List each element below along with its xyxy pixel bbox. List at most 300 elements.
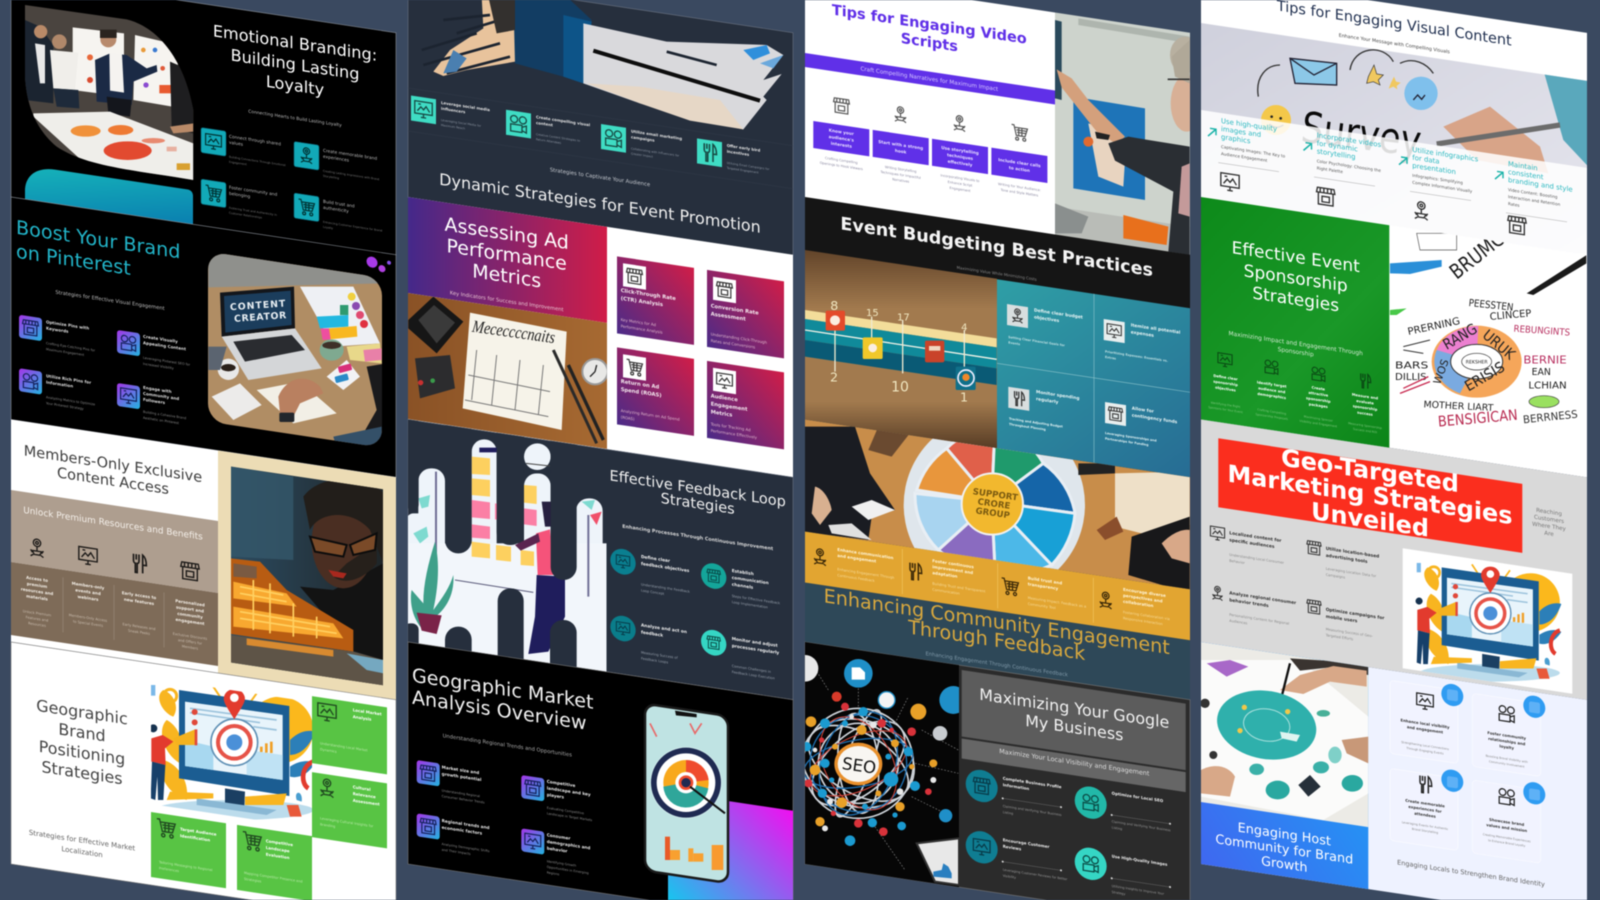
subtitle: Where They [1532,522,1566,533]
card: audience engagement: Engagement [711,401,748,413]
item: consumer demographics: behavior [547,846,568,854]
item: attractive packages: Create [1312,386,1326,392]
item: social media influencers: influencers [441,106,466,114]
item: communication channels: Loop Implementation [732,600,768,609]
item: feedback objectives [610,547,690,600]
item: communication channels: Steps for Effective Feedback [732,594,780,605]
item: monitor spending: Throughout Planning [1009,422,1046,432]
item: location advertising: Campaigns [1326,573,1345,580]
panel background [408,197,793,477]
item: target audience: audience and [1258,386,1286,394]
item: competitive landscape: Landscape in Target Markets [547,811,593,822]
title: Sponsorship [1244,261,1348,297]
image: hand-drawn mind map: WOS [1431,357,1452,386]
item: local SEO: Listing [1112,826,1122,831]
item: images [1208,115,1286,199]
item: shared values: values [229,140,244,148]
panel background [11,0,396,255]
card: local market analysis: Dynamics [320,747,337,754]
text and icons [28,696,388,900]
item: consumer demographics: Regions [547,871,560,876]
card: ROAS [617,347,694,436]
item: high-quality images [1075,845,1171,900]
title: Event Budgeting Best Practices [840,214,1153,281]
image: desk with notes [407,287,610,453]
item: early bird incentives: Offer early bird [727,143,760,153]
panel: Effective Feedback Loop Strategies [407,418,794,700]
item: competitive landscape: players [547,792,564,800]
item: community: Foster community and [229,185,277,198]
item: videos: Color Psychology: Choosing the [1317,158,1381,173]
subtitle: Strategies for Effective Market [29,828,135,853]
image: branding team meeting [24,4,194,181]
title: Performance [447,234,567,275]
item: images: Use high-quality [1221,117,1277,133]
title: Geographic [36,696,128,728]
item: improvement: adaptation [932,570,958,579]
panel: Tips for Engaging Visual Content [1197,0,1597,255]
item: customer reviews: Encourage Customer [1003,837,1050,849]
item: compelling visual content: Creative Content Strategies to [536,132,580,143]
image: presenter pointing [1054,12,1191,255]
item: market size: Market size and [442,765,479,775]
item: regional behavior: Analyze regional consumer [1229,590,1297,606]
item: events and webinars: to Special Events [73,619,103,628]
card: cultural relevance: Assessment [353,798,380,807]
item: target audience: Sponsorship Proposals [1255,412,1288,421]
subtitle: Connecting Hearts to Build Lasting Loyalty [248,109,342,129]
panel: Members-Only Exclusive Content [11,420,396,700]
card: brand values: Showcase brand [1489,817,1524,827]
card: brand values: to Enhance Brand Loyalty [1488,838,1526,848]
item: personalized support: Exclusive Discounts [173,632,207,641]
card: CTR: (CTR) Analysis [621,296,663,308]
panel: Maximizing Your Google My Business [792,642,1190,900]
subtitle: Sponsorship [1278,346,1314,358]
item: branding: Maintain [1508,160,1538,172]
item: contingency funds: Allow for [1132,406,1155,415]
subtitle: Enhancing Engagement Through Continuous Feedback [925,651,1068,678]
item: localized content: Localized content for [1229,530,1282,544]
item: customer reviews [965,830,1068,880]
item: improvement: Foster continuous [932,558,974,569]
card: target audience: Preferences [159,866,179,873]
image: planning documents with teal circle [1197,640,1373,830]
card: target audience: Identification [180,833,210,843]
item: trust: authenticity [323,205,349,215]
item: feedback objectives: feedback objectives [641,561,690,574]
item: calls to action: Include clear calls [998,157,1041,168]
subtitle: Customers [1534,515,1564,525]
title: Growth [1261,854,1307,876]
item: shared values [201,128,286,172]
image: group around support wheel [804,419,1191,590]
subtitle: Localization [61,844,103,859]
card: memorable experiences [1390,760,1463,851]
item: social media influencers: Leverage social media [441,100,490,112]
item: rich pins: Information [46,380,73,389]
text and icons [412,664,594,882]
item: trust: Community Tool [1028,602,1056,610]
item: rich pins [19,368,95,413]
item: location advertising: Utilize location-based [1326,546,1379,560]
item: early access [122,552,156,637]
item: events and webinars: Members-Only Access [69,613,107,623]
title: Assessing Ad [445,213,569,254]
item: community: belonging [229,191,251,200]
title: Geo-Targeted [1281,444,1459,498]
item: calls to action [991,121,1047,199]
item: community and followers: Building a Cohesive Brand [143,410,186,420]
item: regional trends: Analyzing Demographic Shifts [442,842,490,853]
card: cultural relevance: Leveraging Cultural Insights for [320,816,374,828]
item: diverse perspectives: Fostering Collaboration via [1123,610,1170,621]
item: compelling visual content: Create compelling visual [536,114,591,127]
item: feedback objectives: Understanding the Feedback [641,582,690,594]
card: audience engagement: Metrics [711,409,732,419]
phone mockup [645,704,728,883]
item: budget objectives [1007,303,1083,356]
image: hand-drawn mind map: REBUNGINTS [1513,324,1570,339]
item: communication channels: Establish [732,568,754,577]
item: trust: transparency [1028,581,1059,591]
subtitle: Enhancing Processes Through Continuous Improvement [622,524,774,552]
item: monitor spending: regularly [1036,396,1058,406]
image: hand-drawn mind map: PEESSTEN [1468,298,1514,314]
title: Emotional Branding: [213,21,377,65]
card: competitive landscape: Evaluation [266,852,290,860]
image: timeline on wood: 2 [830,370,838,385]
card: cultural relevance: Relevance [353,791,376,799]
panel background [1201,197,1587,477]
image: SEO network globe: SEO [841,754,877,778]
item: localized content [1210,526,1284,571]
subtitle: Maximize Your Local Visibility and Engagement [999,747,1150,778]
card: memorable experiences: experiences for [1408,804,1442,814]
card: local market analysis: Analysis [353,714,372,722]
card: conversion rate: Understanding Click-Through [711,331,767,345]
item: contingency funds: Partnerships for Funding [1105,437,1148,447]
item: regional behavior [1213,586,1297,633]
card: audience engagement: Audience [711,393,738,404]
item: improvement: Building Trust and Transparent [932,582,986,594]
item: branding: Interaction and Retention [1508,194,1561,207]
item: attractive packages: attractive [1308,391,1329,398]
item: competitive landscape [521,775,593,822]
item: optimize pins: Maximum Engagement [46,347,85,357]
card: conversion rate: Rates and Conversions [711,338,755,350]
item: high-quality images: Strategy [1112,890,1125,896]
item: communication channels: channels [732,582,754,591]
item: email marketing [601,124,682,163]
item: personalized support: Members [182,644,198,651]
subtitle: Unlock Premium Resources and Benefits [23,506,203,543]
title: Marketing Strategies [1228,460,1512,530]
item: consumer demographics: Opportunities in Emerging [547,865,589,875]
panel background [1201,0,1587,255]
item: analyze feedback: Feedback Loops [641,656,668,665]
image: hand-drawn mind map: CLINCEP [1489,308,1532,323]
card: relationships: Community Involvement [1489,759,1525,769]
item: strong hook: hook [895,148,907,155]
card: memorable experiences: Brand Storytelling [1412,827,1438,835]
panel: Emotional Branding [0,0,396,255]
item: community and followers: Followers [143,397,166,405]
item: monitor processes: Common Challenges in [732,664,771,674]
item: sponsorship objectives: Sponsors for Your Event [1208,405,1244,414]
item: infographics: Utilize infographics [1412,146,1479,164]
card: CTR: Performance Analysis [621,323,663,335]
text and icons [813,0,1047,205]
item: contingency funds [1105,402,1178,451]
item: measure success: sponsorship [1353,404,1378,412]
card: relationships: loyalty [1499,743,1514,751]
subtitle: Understanding Regional Trends and Opportunities [443,733,572,759]
item: personalized support: and Offers for [178,638,203,646]
title: Enhancing Community Engagement [824,584,1170,659]
item: communication [814,543,894,586]
card: local market analysis: Local Market [353,707,382,717]
panel: Boost Your Brand on Pinterest [11,197,396,477]
item: communication: Continuous Feedback [837,573,876,583]
card: cultural relevance: Cultural [353,784,371,792]
item: know your audience: Crafting Compelling [825,156,858,165]
translucent list panel [1201,110,1587,255]
card: local visibility: Enhance local visibility [1401,717,1450,730]
item: improvement [910,555,986,600]
panel background [805,0,1055,235]
item: regional trends [417,813,490,859]
panel background [805,642,1190,900]
image: timeline on wood: 10 [891,380,909,396]
item: feedback objectives: Define clear [641,554,671,564]
item: social media influencers [411,95,490,134]
item: location advertising: Leveraging Location Data for [1326,567,1377,578]
item: memorable experiences [294,141,380,186]
item: competitive landscape: landscape and key [547,785,591,797]
item: target audience: Identify target [1257,380,1287,389]
item: optimize pins [19,315,96,359]
card: CTR: Click-Through Rate [621,288,676,302]
image: content creator desk: CONTENT [230,298,287,313]
item: measure success [1348,371,1382,435]
item: rich pins: Analyzing Metrics to Optimize [46,395,95,407]
card: competitive landscape: Strategies [244,877,262,884]
panel background [805,197,1190,477]
item: market size: Consumer Behavior Trends [442,794,485,805]
card: cultural relevance: Branding [320,822,335,829]
item: itemize expenses: Extras [1105,355,1116,361]
image: man with glowing model [227,460,387,693]
image: hand-drawn mind map: REKSHER [1466,359,1488,365]
footer caption: Engaging Locals to Strengthen Brand Identity [1397,858,1545,889]
card: brand values [1472,773,1545,864]
card: target audience: Tailoring Messaging to Regional [158,860,212,872]
item: consumer demographics: Consumer [547,832,571,841]
item: branding [1495,158,1573,242]
item: visually appealing content: Appealing Content [143,340,186,352]
title: Boost Your Brand [16,216,180,263]
item: email marketing: campaigns [631,134,655,143]
item: communication: and engagement [837,553,876,564]
item: personalized support: Personalized [175,598,205,608]
image: desk with notes: Mececcccnaits [470,317,556,347]
item: diverse perspectives [1100,583,1170,627]
item: calls to action: to action [1009,165,1030,173]
item: local SEO: Claiming and Verifying Your Business [1112,820,1171,832]
item: videos: for dynamic [1317,139,1358,154]
item: target audience [1255,358,1288,421]
item: calls to action: Tone and Style Matters [1000,188,1038,198]
subtitle: Maximizing Value While Minimizing Costs [957,265,1037,282]
card: relationships: Boosting Brand Visibility with [1486,754,1528,764]
item: customer reviews: Visibility [1003,874,1016,880]
item: trust: Measuring Impact: Feedback as a [1028,596,1086,609]
item: premium resources: Access to [26,575,48,583]
item: localized content: Behavior [1229,559,1245,565]
item: strong hook: Techniques for Impactful [880,170,921,180]
item: budget objectives: Events [1008,341,1020,346]
item: target audience: Crafting Compelling [1257,407,1286,416]
item: shared values: Engagement [229,160,248,166]
item: storytelling [932,112,988,196]
title: Strategies [41,757,123,788]
image: timeline on wood: 15 [866,308,879,319]
item: rich pins: Your Pinterest Strategy [46,401,84,411]
item: communication channels: communication [732,575,769,586]
item: business profile [965,769,1063,816]
item: monitor spending: Monitor spending [1036,389,1080,402]
card: audience engagement: Performance Effectively [711,428,758,440]
panel background [11,420,396,700]
card: target audience [151,812,226,888]
item: location advertising: advertising tools [1326,553,1368,565]
item: attractive packages: sponsorship [1306,396,1331,404]
panel background [1201,642,1587,900]
title: Effective Event [1232,238,1360,277]
image: group around support wheel: GROUP [975,506,1010,521]
image: timeline on wood [802,247,1002,453]
item: improvement: improvement and [932,564,973,575]
panel: Event Budgeting Best Practices [802,197,1190,477]
subtitle: Strategies for Effective Visual Engagement [55,290,165,312]
text and icons [16,216,191,427]
item: sponsorship objectives: Identifying the Right [1211,400,1241,409]
text and icons [1208,235,1382,435]
item: itemize expenses: Prioritizing Expenses: Essentials vs. [1105,350,1168,363]
item: images: graphics [1221,133,1251,145]
item: early bird incentives [697,138,770,176]
subtitle: Craft Compelling Narratives for Maximum Impact [860,66,999,93]
image: monitor with map pin [1390,520,1600,700]
title: Maximizing Your Google [979,685,1169,732]
card: relationships: relationships and [1488,736,1526,746]
panel: Tips for Engaging Video Scripts [805,0,1203,260]
decorative dots [366,256,391,274]
item: community and followers: Aesthetic on Pinterest [143,416,180,425]
card: local market analysis: Understanding Local Market [320,741,368,753]
panel background [408,420,793,700]
card: cultural relevance [312,772,387,848]
title: Geographic Market [412,664,594,714]
card: competitive landscape: Landscape [266,845,290,854]
panel background [1201,420,1587,700]
image: hand-drawn mind map: BENSIGICAN [1437,407,1518,431]
item: branding: Video Content: Boosting [1508,187,1558,200]
title: Scripts [901,30,958,55]
item: local SEO: Optimize for Local SEO [1112,791,1164,803]
item: optimize pins: Keywords [46,326,69,334]
item: regional behavior: Personalizing Content for Regional [1229,613,1289,626]
item: regional trends: economic factors [442,825,483,836]
item: communication: Enhancing Engagement Through [837,567,894,580]
card: audience engagement [707,361,784,449]
item: monitor processes: Feedback Loop Execution [732,670,775,681]
item: compelling visual content [506,110,591,149]
card: ROAS: (ROAS) [621,414,635,422]
item: visually appealing content [117,330,191,373]
item: monitor processes: Monitor and adjust [732,636,778,649]
text and icons [1208,0,1573,242]
image: survey sketch on paper [1200,22,1588,174]
text and icons [610,467,786,682]
item: compelling visual content: content [536,120,553,128]
item: early access: Early Releases and [123,622,155,631]
image: hand-drawn mind map: BERRNESS [1522,408,1579,426]
image: timeline on wood: 17 [897,313,910,324]
item: localized content: specific audiences [1229,537,1275,550]
item: attractive packages: Visibility and Engagement [1299,419,1338,429]
image: hand-drawn mind map: RANG [1440,320,1480,353]
item: analyze feedback: feedback [641,629,663,639]
item: trust: Build trust and [1028,575,1062,586]
item: storytelling: techniques [947,152,974,161]
item: videos [1304,129,1381,213]
item: shared values: Building Connections Through Emotional [229,155,286,167]
item: early access: Early access to [122,590,156,600]
item: events and webinars: events and [75,587,101,596]
item: premium resources: Resources [28,621,46,628]
image: hand-drawn mind map: LCHIAN [1528,380,1567,391]
card: ROAS: Return on Ad [621,379,660,391]
subtitle: Enhance Your Message with Compelling Visuals [1339,33,1450,55]
item: attractive packages [1299,365,1338,429]
item: itemize expenses: Itemize all potential [1131,322,1181,336]
item: feedback objectives: Loop Concept [641,588,665,596]
item: mobile campaigns [1307,600,1385,646]
title: Content Access [57,464,169,498]
item: infographics: presentation [1412,162,1456,176]
item: community [201,179,277,222]
card: local visibility [1390,675,1463,764]
item: branding: Rates [1508,201,1520,208]
title: Building Lasting [231,46,359,84]
item: know your audience: Know your [829,128,855,136]
item: monitor processes: processes regularly [732,643,779,656]
item: rich pins: Utilize Rich Pins for [46,373,92,385]
item: branding: consistent [1508,168,1544,181]
card: CTR: Key Metrics for Ad [621,317,656,327]
card: conversion rate: Assessment [711,311,746,323]
item: email marketing: Utilize email marketing [631,128,682,141]
item: storytelling: Engagement [950,186,971,193]
title: Positioning [39,737,125,769]
item: competitive landscape: Evaluating Competitive [547,806,584,815]
item: location advertising [1307,541,1379,585]
item: memorable experiences: Create memorable brand [323,148,377,162]
item: strong hook: Writing Storytelling [885,165,917,174]
item: personalized support: community [177,611,203,620]
